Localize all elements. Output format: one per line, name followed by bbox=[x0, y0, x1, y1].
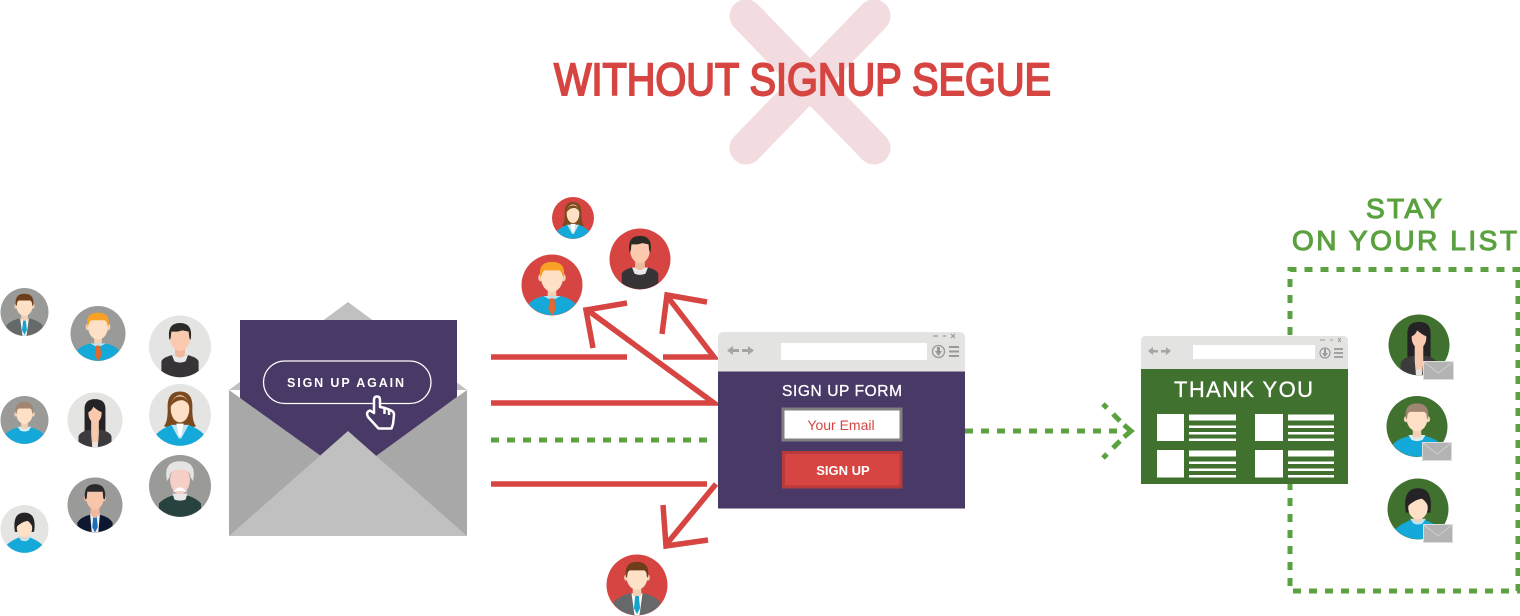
input: your email: Your Email bbox=[807, 417, 875, 433]
avatar: man in navy suit bbox=[68, 478, 122, 532]
heading: stay on your list: ON YOUR LIST bbox=[1292, 225, 1517, 256]
input: your email bbox=[783, 409, 901, 440]
avatar: girl with short hair bbox=[0, 505, 48, 553]
avatar: man in dark sweater, red background bbox=[610, 228, 670, 290]
browser: thank you page bbox=[1141, 336, 1348, 484]
arrow: red line to bottom avatar bbox=[491, 484, 716, 546]
browser: sign up form bbox=[718, 332, 965, 508]
button: sign up again: SIGN UP AGAIN bbox=[287, 376, 404, 390]
avatar: woman, red background bbox=[552, 197, 594, 239]
envelope with sign up again email bbox=[229, 302, 467, 536]
arrow: red line top to avatars right bbox=[491, 295, 714, 357]
heading: thank you: THANK YOU bbox=[1174, 377, 1313, 402]
avatar: man in dark sweater bbox=[149, 316, 211, 378]
icon: pointer hand bbox=[367, 396, 394, 428]
heading: stay on your list bbox=[1292, 193, 1517, 256]
title: WITHOUT SIGNUP SEGUE bbox=[554, 54, 1051, 105]
avatar: man with envelope bbox=[1386, 396, 1452, 460]
heading: sign up form: SIGN UP FORM bbox=[782, 383, 902, 400]
avatar: woman with envelope bbox=[1388, 314, 1454, 380]
avatar: woman with black hair bbox=[68, 392, 122, 448]
avatar: orange hair man, red background bbox=[522, 254, 582, 316]
button: sign up bbox=[784, 452, 901, 487]
avatar: man with blue tie bbox=[0, 288, 48, 336]
heading: stay on your list: STAY bbox=[1366, 193, 1442, 224]
button: sign up again bbox=[264, 361, 431, 404]
avatar: man with tie, red background bbox=[606, 554, 668, 616]
button: sign up: SIGN UP bbox=[816, 463, 870, 478]
arrow: green dotted path to form bbox=[491, 438, 710, 442]
avatar: girl with envelope bbox=[1388, 478, 1452, 542]
arrow: red line to orange avatar bbox=[491, 303, 714, 403]
avatar group: subscribers bbox=[0, 288, 211, 553]
avatars: retained subscribers in green bbox=[1386, 314, 1454, 542]
avatar: man in blue sweater bbox=[0, 396, 48, 444]
avatar: woman with brown hair bbox=[149, 384, 211, 446]
content blocks bbox=[1157, 414, 1334, 478]
avatar: man with orange hair bbox=[70, 306, 126, 361]
avatar: old man bbox=[149, 455, 211, 517]
dashed box: stay on your list bbox=[1290, 270, 1518, 591]
avatars: churned subscribers in red bbox=[522, 197, 670, 616]
arrow: green dotted to thank you page bbox=[965, 404, 1131, 458]
icon: large pink X behind title bbox=[746, 16, 874, 148]
